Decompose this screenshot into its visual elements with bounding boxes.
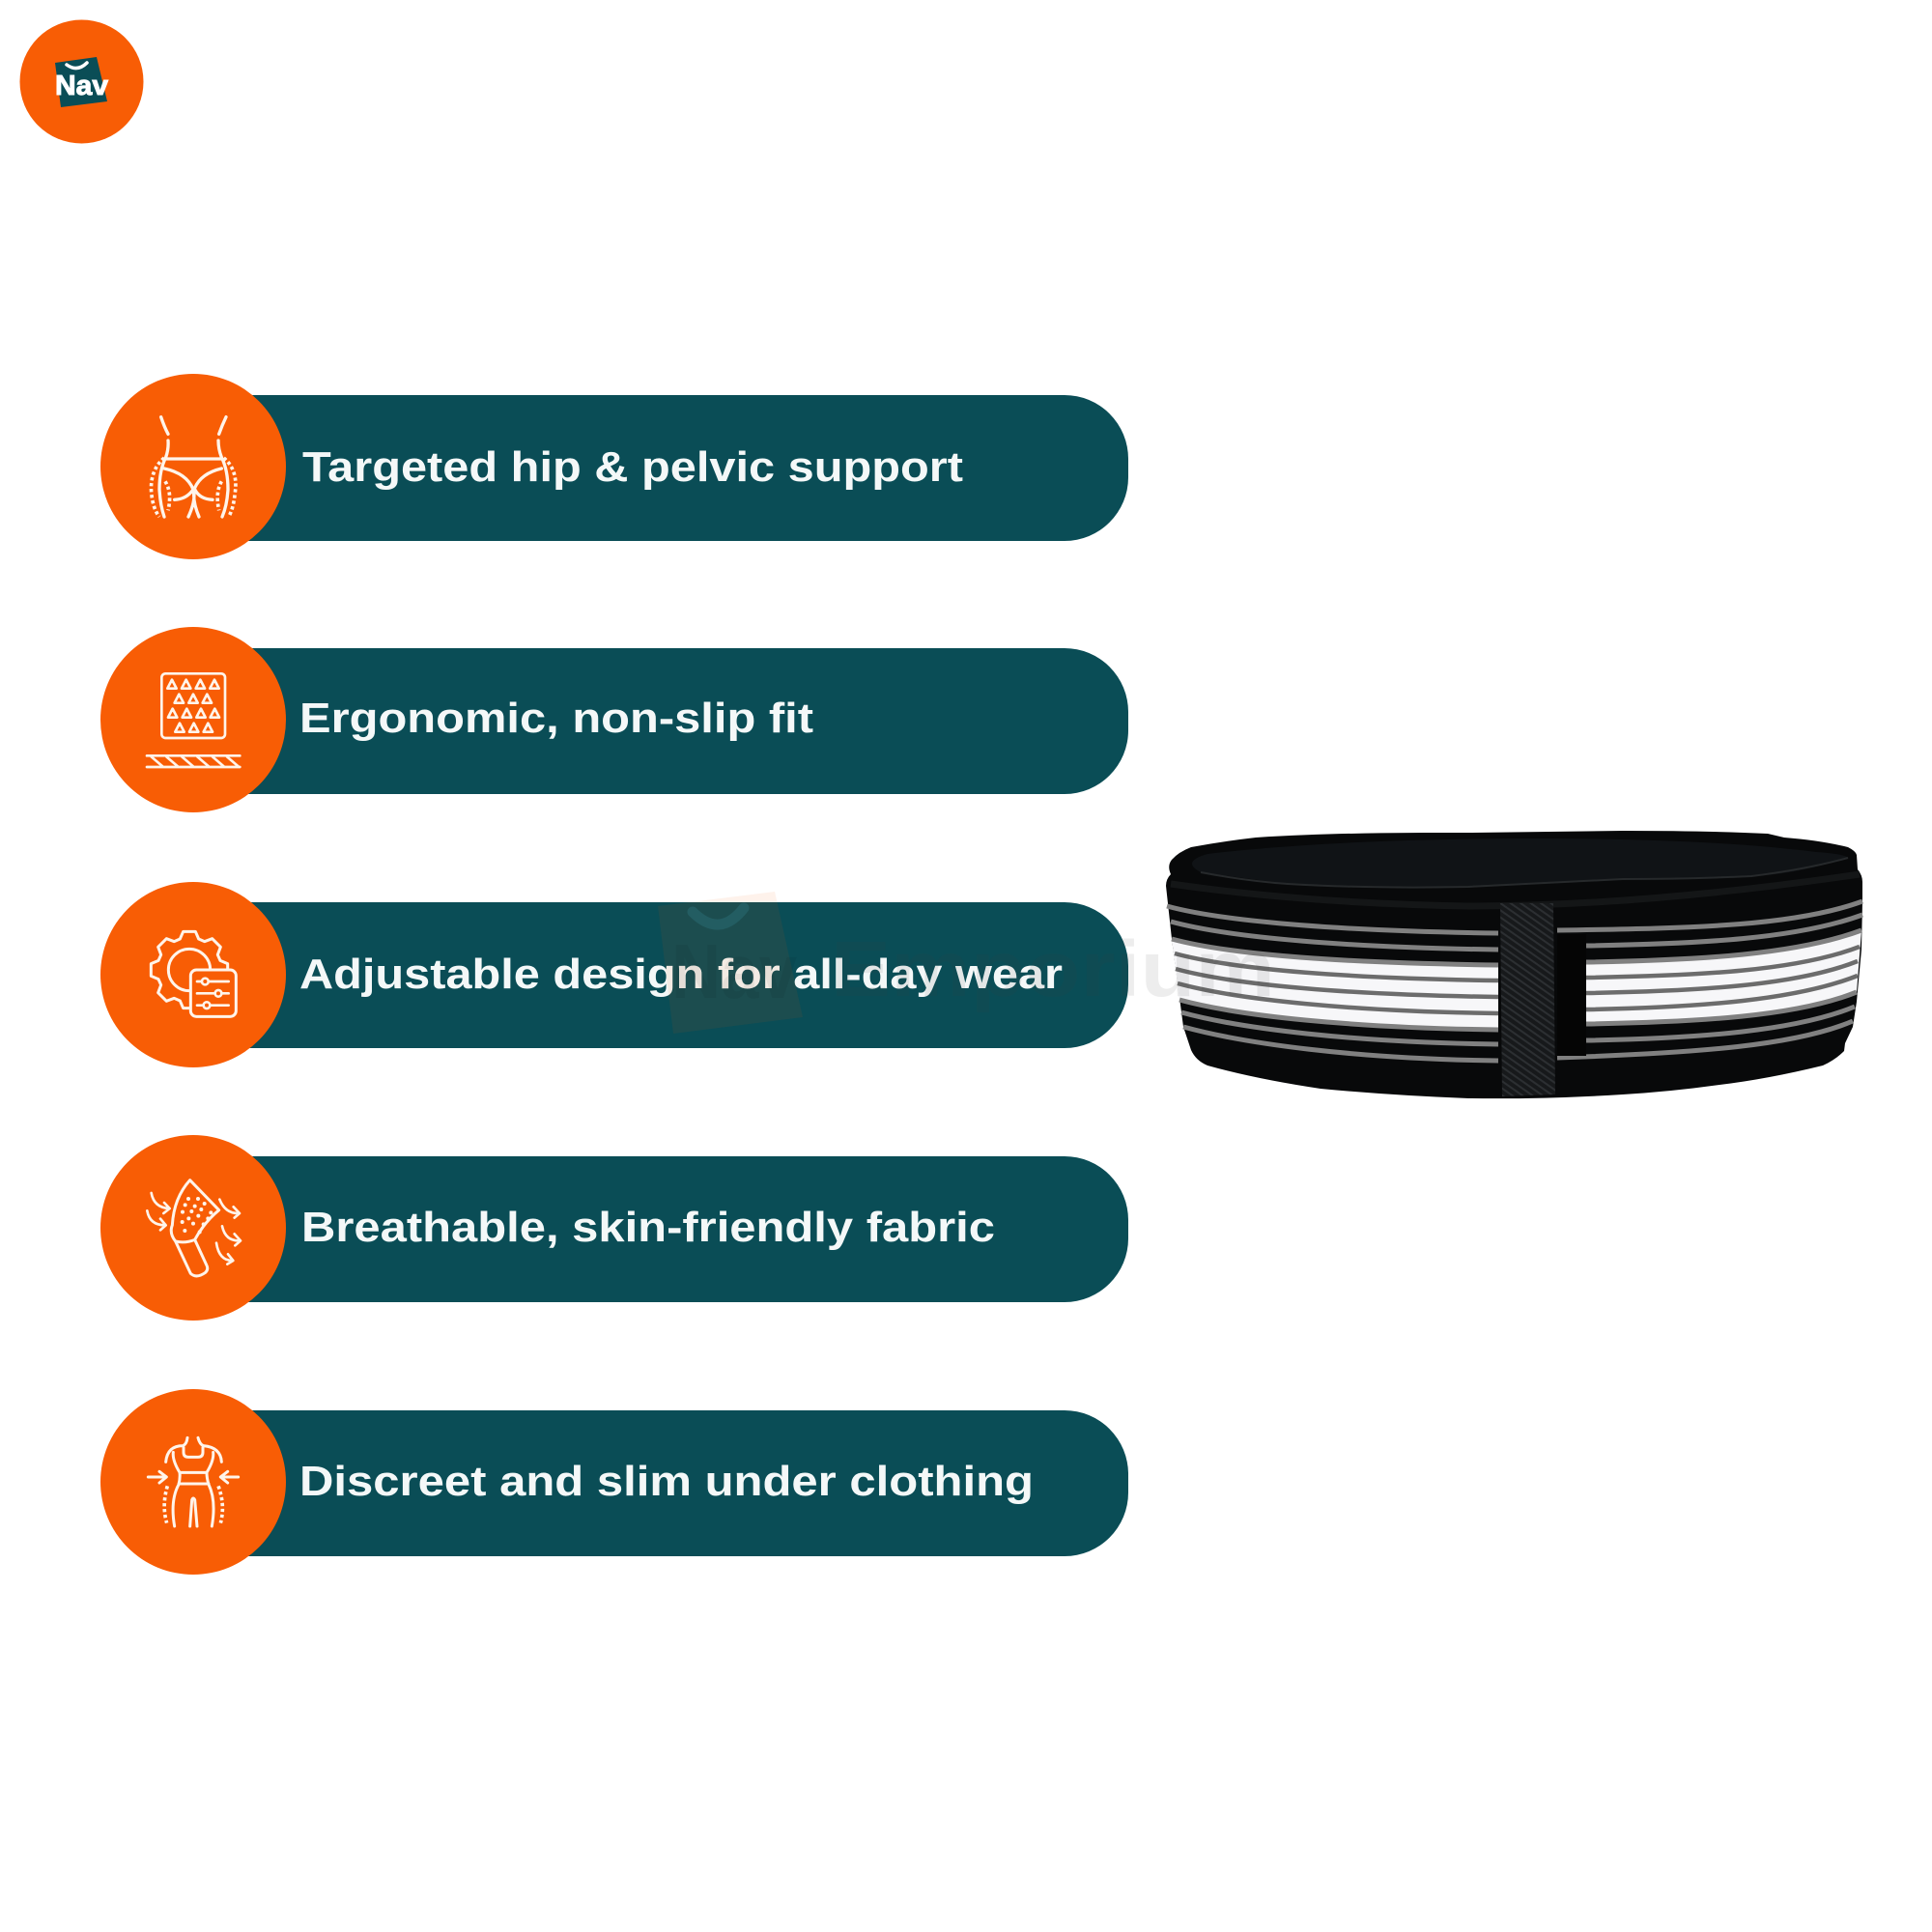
feature row: breathable fabric	[100, 1135, 1128, 1321]
label pill: Targeted hip & pelvic support	[302, 443, 963, 491]
label pill: Discreet and slim under clothing	[299, 1458, 1034, 1505]
logo badge	[19, 19, 143, 143]
belt body	[1166, 831, 1862, 1098]
belt inner lining	[1192, 838, 1848, 887]
logo badge: Nav	[55, 71, 108, 101]
watermark: Emporium	[831, 925, 1275, 1013]
feature row: discreet and slim	[100, 1389, 1128, 1575]
black closure patch	[1557, 934, 1586, 1056]
label pill: Adjustable design for all-day wear	[299, 951, 1063, 998]
icon: hips	[100, 374, 286, 559]
label pill: Breathable, skin-friendly fabric	[301, 1204, 995, 1251]
stitched band	[1171, 874, 1860, 906]
centre strap	[1500, 903, 1555, 1096]
belt rim seam	[1201, 858, 1848, 888]
watermark: Nav	[671, 928, 797, 1014]
feature row: hip and pelvic support	[100, 374, 1128, 559]
elastic white band, right	[1586, 930, 1861, 1024]
stripes, right	[1557, 901, 1862, 1058]
icon: gear and sliders	[100, 882, 286, 1067]
label pill	[184, 395, 1128, 541]
label pill	[184, 1156, 1128, 1302]
feature row: non-slip fit	[100, 627, 1128, 812]
label pill: Ergonomic, non-slip fit	[299, 695, 813, 742]
icon: non-slip grip	[100, 627, 286, 812]
icon: slim body	[100, 1389, 286, 1575]
label pill	[184, 648, 1128, 794]
label pill	[184, 902, 1128, 1048]
stripes, left	[1167, 906, 1498, 1061]
watermark	[658, 892, 1275, 1034]
product photo: black and white support belt	[1166, 831, 1862, 1098]
feature row: adjustable design	[100, 882, 1128, 1067]
label pill	[184, 1410, 1128, 1556]
icon: breathable fabric	[100, 1135, 286, 1321]
elastic white band, left	[1172, 939, 1498, 1030]
